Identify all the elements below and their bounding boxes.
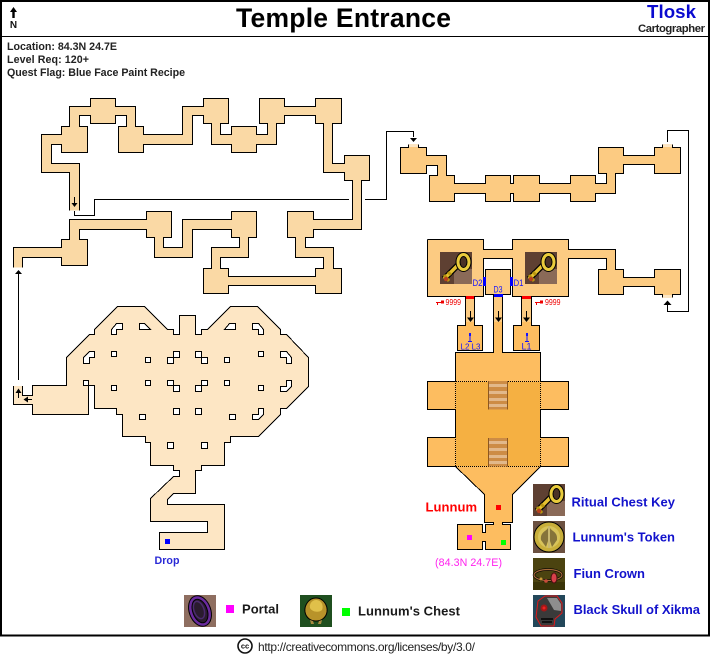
title: Temple Entrance xyxy=(236,3,451,33)
portal marker xyxy=(467,535,472,540)
icon: north arrow: N xyxy=(10,20,17,31)
location info block: Level Req: 120+ xyxy=(7,54,89,66)
connector lines: upper section links xyxy=(15,132,417,380)
legend: Lunnum's chest: Lunnum's Chest xyxy=(358,604,461,618)
lever room L2 L3 xyxy=(458,326,482,350)
legend: ritual chest key xyxy=(533,484,676,516)
legend: ritual chest key: Ritual Chest Key xyxy=(572,494,676,510)
legend: portal xyxy=(184,595,279,627)
legend: portal: Portal xyxy=(242,602,279,616)
legend: Fiun crown xyxy=(533,558,645,590)
map section: heart shaped cavern xyxy=(13,306,308,550)
license footer: cc xyxy=(241,642,249,650)
legend: Lunnum's token: Lunnum's Token xyxy=(572,530,675,544)
connector line: right side loop xyxy=(664,130,688,312)
lever room L1 xyxy=(514,326,540,350)
door labels xyxy=(460,278,532,352)
legend: Lunnum's chest xyxy=(300,595,461,627)
license footer: http://creativecommons.org/licenses/by/3.0/ xyxy=(258,640,476,654)
door labels: L2 L3 xyxy=(460,342,481,352)
corridor arrows xyxy=(467,311,530,322)
drop point marker xyxy=(154,539,180,567)
Lunnum boss marker: Lunnum xyxy=(426,500,477,514)
icon: lever markers xyxy=(468,334,529,342)
map section: upper winding corridors xyxy=(14,98,370,294)
location info block: Location: 84.3N 24.7E xyxy=(7,41,117,53)
cartographer credit xyxy=(638,1,706,35)
key requirement labels xyxy=(436,297,561,307)
room: D3 antechamber xyxy=(486,270,510,294)
map section: key rooms xyxy=(428,240,680,298)
key requirement labels: 9999 xyxy=(446,297,461,307)
map section: upper right corridor xyxy=(400,144,680,202)
icon: cavern entry arrows xyxy=(16,388,32,402)
doors: blue D1 D2 D3 and red key doors xyxy=(466,277,531,299)
legend: Fiun crown: Fiun Crown xyxy=(574,566,645,581)
legend: Lunnum's token xyxy=(533,521,675,553)
key requirement labels: 9999 xyxy=(545,297,561,307)
map section: lower hall xyxy=(428,323,568,550)
chest marker xyxy=(501,540,506,545)
door labels: D3 xyxy=(494,284,502,296)
drop point marker: Drop xyxy=(154,555,180,567)
staircase lower xyxy=(488,438,508,466)
door labels: D1 xyxy=(514,278,524,289)
legend: black skull of Xikma xyxy=(533,595,701,627)
cartographer credit: Tlosk xyxy=(647,1,697,22)
cavern pillars xyxy=(84,324,292,448)
icon: ritual key in right room xyxy=(525,252,557,284)
staircase upper xyxy=(488,381,508,410)
icon: north arrow xyxy=(10,7,17,31)
location info block xyxy=(7,41,185,79)
cartographer credit: Cartographer xyxy=(638,23,706,35)
location info block: Quest Flag: Blue Face Paint Recipe xyxy=(7,67,185,79)
icon: ritual key in left room xyxy=(440,252,472,284)
header rule xyxy=(0,36,710,37)
door labels: L1 xyxy=(522,342,532,352)
door labels: D2 xyxy=(472,278,482,289)
legend: black skull of Xikma: Black Skull of Xikma xyxy=(574,602,701,617)
Lunnum boss marker xyxy=(426,500,501,514)
corridors to lever rooms xyxy=(466,294,532,326)
portal coordinates: (84.3N 24.7E) xyxy=(435,557,502,569)
